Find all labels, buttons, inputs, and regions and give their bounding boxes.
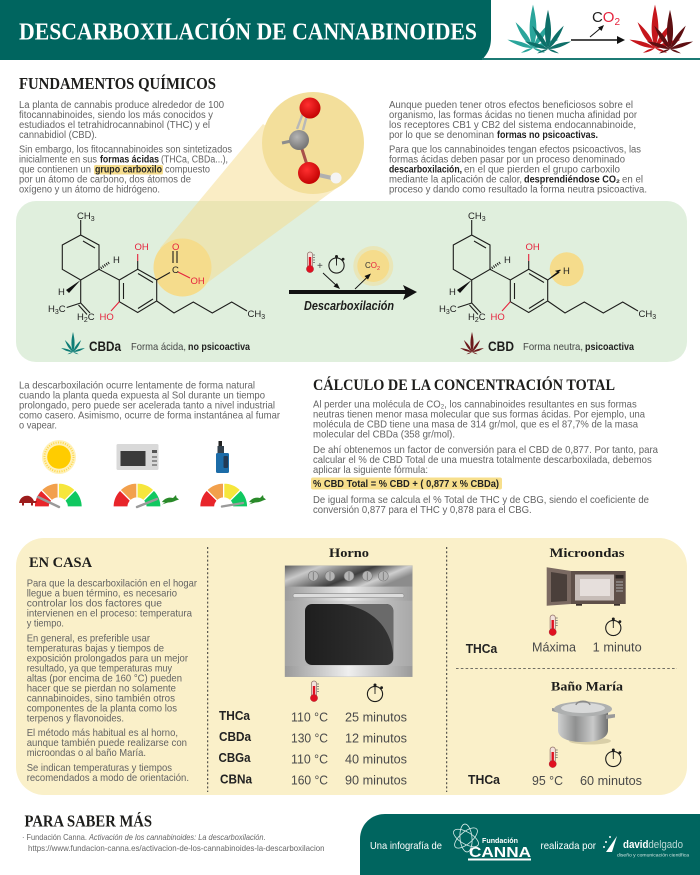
logo: Fundación Canna xyxy=(451,824,532,861)
header icon: decarboxylation of leaves xyxy=(507,5,694,54)
table: water bath: 60 minutos xyxy=(580,774,642,788)
logo: David Delgado: daviddelgado xyxy=(623,839,683,851)
text block: total concentration: calcular el % de CBD Total de una muestra totalmente descarboxilada, debemos xyxy=(313,454,652,466)
text block: intro right xyxy=(389,100,647,196)
text block: intro right: formas ácidas deben pasar por un proceso denominado xyxy=(389,154,625,166)
text block: intro left: grupo carboxilo xyxy=(95,164,162,176)
icon: thermometer xyxy=(549,747,558,768)
title: DESCARBOXILACIÓN DE CANNABINOIDES xyxy=(19,18,477,46)
icon: sun xyxy=(42,440,76,474)
arrow: CO2 release: 2 xyxy=(614,17,620,28)
heading: fundamentos químicos: FUNDAMENTOS QUÍMICOS xyxy=(19,74,216,93)
table: oven times: 40 minutos xyxy=(345,752,407,766)
text block: intro right: Para que los cannabinoides tengan efectos psicoactivos, las xyxy=(389,144,641,156)
icon: CO2 release xyxy=(353,246,393,289)
icon: stopwatch xyxy=(606,748,621,767)
table: oven times xyxy=(218,709,407,788)
column: microondas xyxy=(466,545,642,656)
icon: carboxyl molecule model xyxy=(262,92,364,194)
text block: intro left: compuesto xyxy=(165,164,210,176)
chemical structure: CBDa xyxy=(48,211,265,324)
table: oven times: 25 minutos xyxy=(345,710,407,724)
icon: microwave small xyxy=(116,444,158,470)
label: CBD neutral form: Forma neutra, xyxy=(523,341,583,353)
text block: en casa: microondas o al baño María. xyxy=(27,747,146,759)
chemical structure: CBDa: OH xyxy=(134,242,149,253)
text block: how decarboxylation occurs: como casero. Asimismo, ocurre de forma instantánea al fumar xyxy=(19,410,280,422)
chemical structure: CBDa: H xyxy=(58,287,65,298)
column: horno xyxy=(218,545,412,788)
text block: intro left: inicialmente en sus xyxy=(19,154,97,166)
column: baño maría xyxy=(468,678,642,788)
table: oven times: 110 °C xyxy=(291,710,328,724)
table: oven times: 130 °C xyxy=(291,732,328,746)
text block: intro right: en el que pierden el grupo carboxilo xyxy=(464,164,620,176)
text block: intro left: Sin embargo, los fitocannabinoides son sintetizados xyxy=(19,144,232,156)
text block: intro left xyxy=(19,100,232,196)
heading: cálculo de la concentración total: CÁLCULO DE LA CONCENTRACIÓN TOTAL xyxy=(313,375,615,394)
text block: en casa: llegue a buen término, es necesario xyxy=(27,588,177,600)
icon: CO2 release: CO xyxy=(365,261,377,270)
label: CBDa acid form xyxy=(61,332,250,355)
chemical structure: CBDa: OH xyxy=(190,276,205,287)
table: water bath: 95 °C xyxy=(532,774,563,788)
text block: en casa: componentes de la planta como los xyxy=(27,702,177,714)
table: microwave: Máxima xyxy=(532,640,576,654)
text block: en casa: recomendados a modo de orientación. xyxy=(27,772,189,784)
panel: decarboxylation reaction xyxy=(16,201,687,362)
text block: intro right: mediante la aplicación de calor, xyxy=(389,174,522,186)
text block: total concentration: neutras tienen menor masa molecular que sus formas ácidas. Por ejemplo, una xyxy=(313,408,645,420)
table: microwave xyxy=(466,640,642,656)
chemical structure: CBDa: 3 xyxy=(91,216,95,223)
table: oven times: CBNa xyxy=(220,772,253,786)
text block: intro right: por lo que se denominan xyxy=(389,130,494,141)
chemical structure: CBD: 2 xyxy=(475,317,479,324)
text block: en casa: El método más habitual es al horno, xyxy=(27,727,178,739)
footer band: credits: realizada por xyxy=(540,840,596,852)
logo: David Delgado: diseño y comunicación científica xyxy=(617,852,690,858)
chemical structure: CBD: H xyxy=(563,266,570,277)
arrow: decarboxylation process: + xyxy=(317,261,323,272)
table: oven times: 160 °C xyxy=(291,774,328,788)
label: CBD neutral form: psicoactiva xyxy=(585,341,634,353)
chemical structure: CBD: H xyxy=(468,312,475,323)
text block: total concentration: De ahí obtenemos un factor de conversión para el CBD de 0,877. Por tanto, para xyxy=(313,444,658,456)
chemical structure: CBD: OH xyxy=(526,242,540,253)
text block: intro right: desprendiéndose CO₂ xyxy=(524,174,620,186)
text block: en casa: aunque también puede realizarse con xyxy=(27,737,187,749)
icon: CO2 release: 2 xyxy=(377,266,380,272)
icon: oven xyxy=(285,566,412,677)
icon: red leaves xyxy=(629,5,694,54)
text block: en casa xyxy=(27,578,197,784)
text block: how decarboxylation occurs: cuando la planta queda expuesta al Sol durante un tiempo xyxy=(19,390,265,402)
table: oven times: CBDa xyxy=(219,730,252,744)
text block: intro left: por un átomo de carbono, dos átomos de xyxy=(19,174,191,186)
icon: pot xyxy=(552,701,615,744)
chemical structure: CBDa: C xyxy=(59,304,66,315)
chemical structure: CBDa: 3 xyxy=(55,309,59,316)
chemical structure: CBD: H xyxy=(504,255,511,266)
footer band: credits xyxy=(360,814,700,875)
icon: rabbit xyxy=(162,495,179,504)
chemical structure: CBDa: H xyxy=(48,304,55,315)
table: oven times: 90 minutos xyxy=(345,774,407,788)
arrow: decarboxylation process: Descarboxilación xyxy=(304,299,394,313)
text block: en casa: Para que la descarboxilación en el hogar xyxy=(27,578,197,590)
text block: en casa: exposición prolongados para un mejor xyxy=(27,652,188,664)
gauge: fast, microwave xyxy=(113,483,179,507)
icon: stopwatch xyxy=(329,255,344,273)
highlight: hydrogen xyxy=(550,252,584,286)
table: microwave: 1 minuto xyxy=(593,640,642,654)
icon: thermometer xyxy=(306,252,315,273)
text block: en casa: intervienen en el proceso: temperatura xyxy=(27,608,192,620)
text block: intro right: proceso y dando como resultado la forma neutra psicoactiva. xyxy=(389,184,647,196)
label: CBD neutral form xyxy=(460,332,634,355)
chemical structure: CBD: 3 xyxy=(482,216,486,223)
text block: total concentration: De igual forma se calcula el % Total de THC y de CBG, siendo el coeficiente de xyxy=(313,494,649,506)
arrow: decarboxylation process xyxy=(289,246,417,313)
text block: intro right: descarboxilación, xyxy=(389,164,462,176)
icon: rabbit xyxy=(249,495,266,504)
table: water bath: THCa xyxy=(468,773,501,787)
chemical structure: CBD: 3 xyxy=(446,309,450,316)
icon: vaporizer xyxy=(216,441,229,473)
text block: how decarboxylation occurs: o vapear. xyxy=(19,420,57,432)
text block: en casa: controlar los dos factores que xyxy=(27,598,162,610)
text block: intro right: los receptores CB1 y CB2 del sistema endocannabinoide, xyxy=(389,120,636,131)
text block: total concentration: molecular del CBDa (358 gr/mol). xyxy=(313,428,455,440)
text block: intro left: (THCa, CBDa...), xyxy=(161,154,228,166)
text block: intro right: organismo, las formas ácidas no tienen mucha afinidad por xyxy=(389,110,638,121)
header banner xyxy=(0,0,700,60)
panel: en casa xyxy=(16,538,687,795)
text block: total concentration: molécula de CBD tiene una masa de 314 gr/mol, que es el 87,7% de la masa xyxy=(313,418,638,430)
text block: en casa: terpenos y flavonoides. xyxy=(27,712,124,724)
icon: stopwatch xyxy=(606,618,621,636)
text block: total concentration: conversión 0,877 para el THC y 0,878 para el CBG. xyxy=(313,504,532,516)
text block: intro left: que contienen un xyxy=(19,164,91,176)
heading: microondas: Microondas xyxy=(550,545,624,560)
chemical structure: CBD: CH xyxy=(468,211,482,222)
text block: en casa: temperaturas bajas y tiempos de xyxy=(27,642,164,654)
text block: how decarboxylation occurs xyxy=(19,380,280,432)
chemical structure: CBD: 3 xyxy=(652,314,656,321)
highlight: carboxyl group xyxy=(154,238,212,296)
chemical structure: CBDa: H xyxy=(77,312,84,323)
table: oven times: 12 minutos xyxy=(345,732,407,746)
label: CBDa acid form: Forma ácida, xyxy=(131,341,186,353)
table: water bath xyxy=(468,773,642,788)
logo: David Delgado xyxy=(603,836,690,858)
gauge: slow, sun xyxy=(19,483,82,507)
chemical structure: CBD: CH xyxy=(638,309,652,320)
formula: CBD total: % CBD Total = % CBD + ( 0,877 x % CBDa) xyxy=(313,478,499,490)
label: CBDa acid form: CBDa xyxy=(89,338,121,354)
chemical structure: CBD: H xyxy=(449,287,456,298)
text block: intro left: La planta de cannabis produce alrededor de 100 xyxy=(19,100,224,111)
text block: en casa: En general, es preferible usar xyxy=(27,632,150,644)
chemical structure: CBD: H xyxy=(439,304,446,315)
gauge: instant, vaporizer xyxy=(200,483,266,507)
heading: en casa: EN CASA xyxy=(29,555,93,571)
text block: references: · Fundación Canna. Activación de los cannabinoides: La descarboxilación. xyxy=(22,832,266,842)
heading: para saber más: PARA SABER MÁS xyxy=(24,812,152,830)
icon: thermometer xyxy=(310,681,319,702)
text block: intro left: oxígeno y un átomo de hidrógeno. xyxy=(19,184,160,196)
chemical structure: CBDa: CH xyxy=(248,309,261,320)
text block: en casa: altas (por encima de 160 °C) pueden xyxy=(27,672,182,684)
chemical structure: CBD xyxy=(439,211,656,324)
logo: Fundación Canna: CANNA xyxy=(469,845,532,861)
text block: en casa: Se indican temperaturas y tiempos xyxy=(27,762,172,774)
text block: references xyxy=(22,832,325,853)
arrow: CO2 release xyxy=(571,9,625,44)
table: microwave: THCa xyxy=(466,642,498,656)
icon: stopwatch xyxy=(367,684,383,702)
chemical structure: CBDa: C xyxy=(88,312,95,323)
text block: intro left: cannabidiol (CBD). xyxy=(19,130,97,141)
text block: intro left: estudiados el tetrahidrocannabinol (THC) y el xyxy=(19,120,210,131)
text block: total concentration: aplicar la siguiente fórmula: xyxy=(313,464,428,476)
table: oven times: 110 °C xyxy=(291,752,328,766)
chemical structure: CBDa: HO xyxy=(100,312,114,323)
chemical structure: CBDa: 2 xyxy=(84,317,88,324)
text block: intro right: en el xyxy=(622,174,643,186)
icon: open microwave xyxy=(547,567,626,606)
table: oven times: CBGa xyxy=(218,751,251,765)
text block: intro left: formas ácidas xyxy=(100,154,159,166)
chemical structure: CBDa: C xyxy=(172,265,179,276)
text block: total concentration: Al perder una molécula de CO₂, los cannabinoides resultantes en sus formas xyxy=(313,398,637,410)
heading: baño maría: Baño María xyxy=(551,678,624,694)
text block: how decarboxylation occurs: La descarboxilación ocurre lentamente de forma natural xyxy=(19,380,255,392)
text block: en casa: y tiempo. xyxy=(27,618,64,630)
table: oven times: THCa xyxy=(219,709,251,723)
text block: intro left: fitocannabinoides, siendo los más conocidos y xyxy=(19,110,213,121)
label: CBD neutral form: CBD xyxy=(488,338,514,354)
chemical structure: CBDa: 3 xyxy=(261,314,265,321)
text block: intro right: formas no psicoactivas. xyxy=(497,130,598,141)
chemical structure: CBD: HO xyxy=(490,312,505,323)
label: CBDa acid form: no psicoactiva xyxy=(188,341,250,353)
text block: intro right: Aunque pueden tener otros efectos beneficiosos sobre el xyxy=(389,100,633,111)
heading: horno: Horno xyxy=(329,545,369,560)
chemical structure: CBDa: CH xyxy=(77,211,91,222)
icon: thermometer xyxy=(549,615,558,636)
icon: turtle xyxy=(19,496,37,506)
chemical structure: CBDa: H xyxy=(113,255,120,266)
logo: Fundación Canna: Fundación xyxy=(482,836,518,845)
chemical structure: CBDa: O xyxy=(172,242,179,253)
text block: total concentration xyxy=(313,398,658,516)
chemical structure: CBD: C xyxy=(479,312,486,323)
icon: teal leaves xyxy=(507,5,572,54)
text block: en casa: resultado, ya que temperaturas muy xyxy=(27,662,173,674)
chemical structure: CBD: C xyxy=(450,304,457,315)
text block: references: https://www.fundacion-canna.es/activacion-de-los-cannabinoides-la-descarboxilacion xyxy=(28,843,325,853)
arrow: CO2 release: CO xyxy=(592,9,614,26)
footer band: credits: Una infografía de xyxy=(370,840,442,852)
text block: en casa: hacer que se pierdan no solamente xyxy=(27,682,176,694)
text block: how decarboxylation occurs: prolongado, pero puede ser acelerada tanto a nivel industrial xyxy=(19,400,275,412)
text block: en casa: cannabinoides, sino también otros xyxy=(27,692,175,704)
callout beam: carboxyl group zoom xyxy=(160,124,345,283)
